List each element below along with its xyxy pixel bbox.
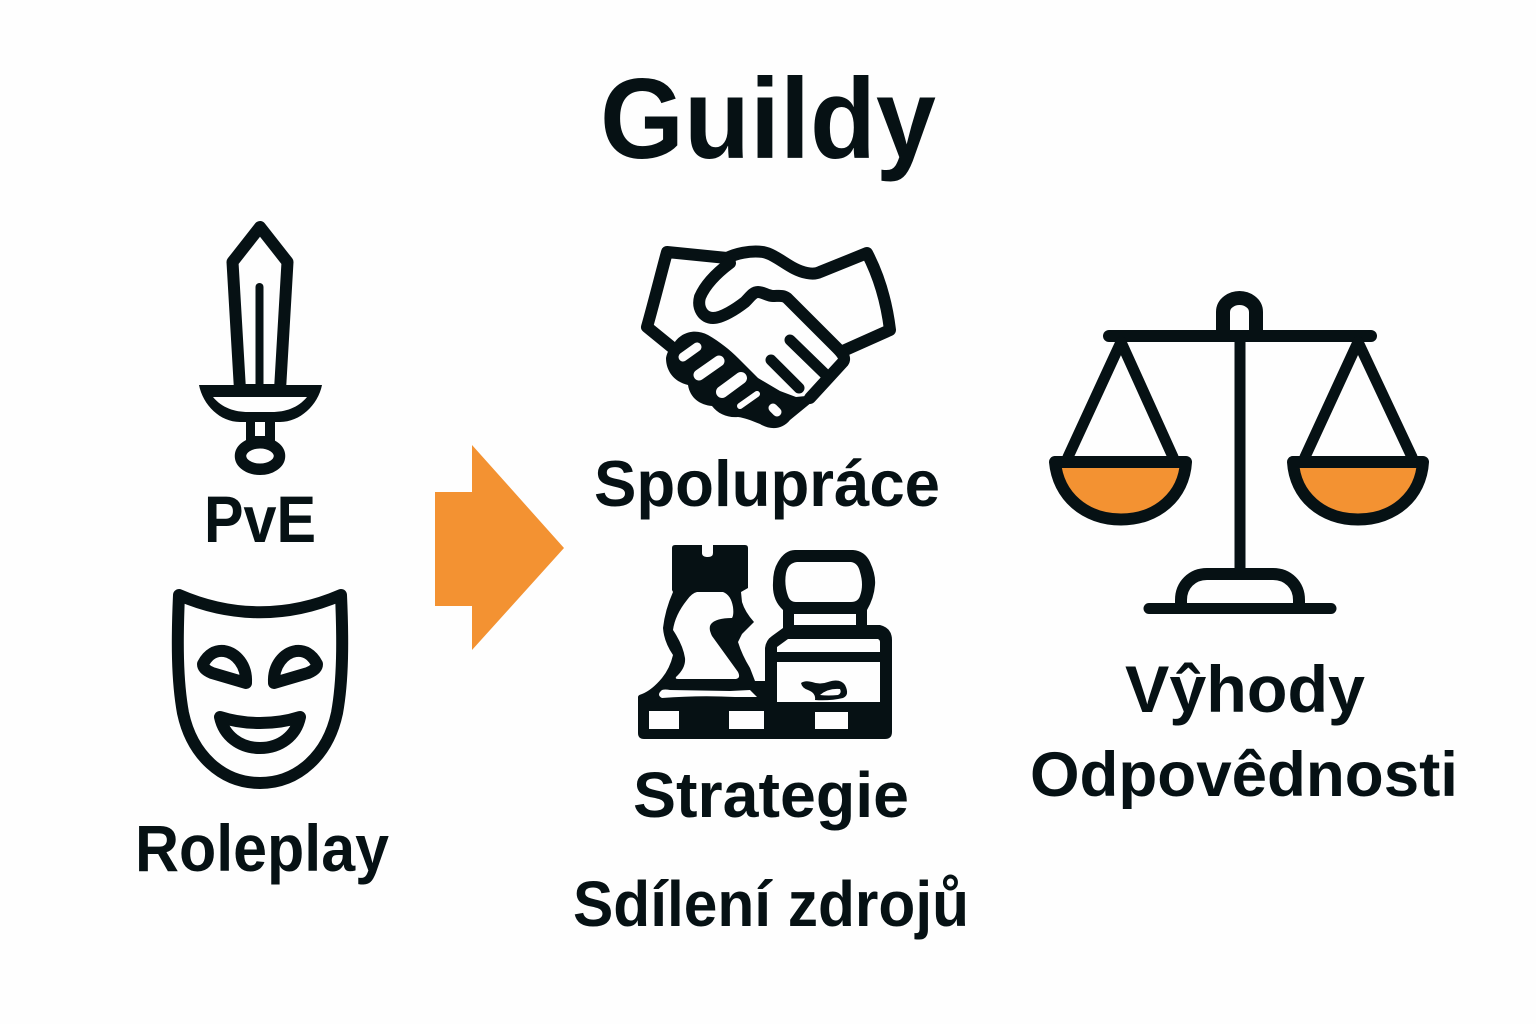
icon: handshake [647,251,890,428]
title: Guildy [600,56,936,183]
label: Roleplay: Roleplay [135,811,389,885]
icon: sword [199,227,322,469]
label: PvE: PvE [204,482,316,556]
label: Spolupráce: Spolupráce [594,447,940,520]
label: Strategie: Strategie [633,759,909,831]
arrow [435,445,564,650]
label: Odpovědnosti: Odpovêdnosti [1030,740,1458,810]
label: Sdílení zdrojů: Sdílení zdrojů [573,868,969,940]
icon: scales [1055,298,1423,608]
label: Výhody: Vŷhody [1125,652,1365,726]
icon: theatre mask [178,595,342,783]
icon: chess pieces [638,545,892,739]
